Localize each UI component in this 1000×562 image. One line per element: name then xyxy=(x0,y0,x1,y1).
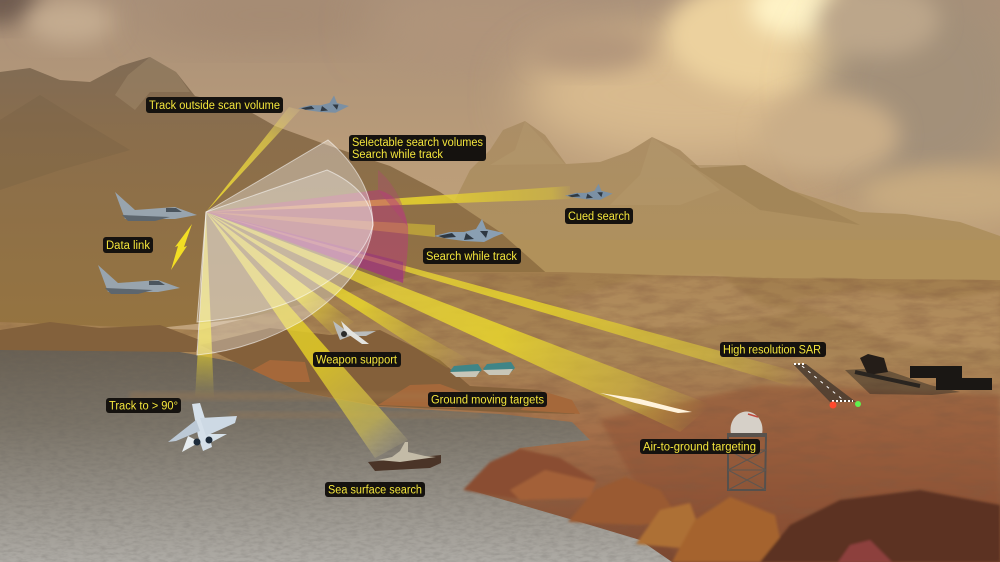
target jet: track outside scan volume xyxy=(298,96,349,113)
airbase hangars xyxy=(845,354,992,395)
fighter jet: track to over 90 degrees xyxy=(168,403,237,452)
ship: sea surface search xyxy=(368,442,441,471)
runway xyxy=(793,364,861,408)
label: Selectable search volumes / Search while track: Selectable search volumes xyxy=(352,137,483,149)
fighter jet: lower Eurofighter xyxy=(98,265,180,294)
tanks: ground moving targets xyxy=(450,362,515,377)
water xyxy=(0,350,672,562)
coastal hills left xyxy=(0,322,580,414)
label: Weapon support: Weapon support xyxy=(316,354,398,366)
label: Data link xyxy=(103,237,153,253)
label: High resolution SAR: High resolution SAR xyxy=(723,344,821,356)
radar beam: high resolution SAR xyxy=(206,212,805,386)
label: Selectable search volumes / Search while track xyxy=(349,135,486,161)
target jet: cued search xyxy=(565,184,613,200)
radar beam: air-to-ground targeting xyxy=(206,212,712,432)
missile trail xyxy=(600,393,692,413)
magenta search volume xyxy=(206,170,408,283)
label: Data link: Data link xyxy=(106,240,150,252)
label: Sea surface search: Sea surface search xyxy=(328,484,422,496)
far mountain ridge xyxy=(300,121,1000,310)
radome tower xyxy=(727,412,767,490)
target jet: search while track xyxy=(434,219,504,242)
selectable search volume: inner sector xyxy=(197,170,373,322)
radar beam: search while track xyxy=(206,212,435,237)
drone: weapon support xyxy=(333,321,376,344)
radar beam: track to over 90 degrees xyxy=(195,212,214,398)
radar beam: cued search xyxy=(206,186,570,212)
label: Track outside scan volume: Track outside scan volume xyxy=(149,100,280,112)
label: Selectable search volumes / Search while track: Search while track xyxy=(352,149,443,161)
selectable search volume: outer sector xyxy=(197,140,373,355)
label: Search while track: Search while track xyxy=(426,251,517,263)
label: Track to > 90°: Track to > 90° xyxy=(109,400,178,412)
icon: data link lightning xyxy=(171,224,192,270)
foreground hills xyxy=(463,449,1000,562)
label: Air-to-ground targeting: Air-to-ground targeting xyxy=(643,442,756,454)
radar beam: ground moving targets xyxy=(206,212,470,368)
fighter jet: top Eurofighter xyxy=(115,192,197,221)
label: Cued search: Cued search xyxy=(568,211,630,223)
radar beam: weapon support xyxy=(206,212,354,335)
midground terrain xyxy=(0,272,1000,562)
label: Ground moving targets: Ground moving targets xyxy=(431,394,544,406)
radar beam: sea surface search xyxy=(206,212,408,458)
radar beam: track outside scan volume xyxy=(206,107,300,212)
left mountain massif xyxy=(0,57,560,345)
